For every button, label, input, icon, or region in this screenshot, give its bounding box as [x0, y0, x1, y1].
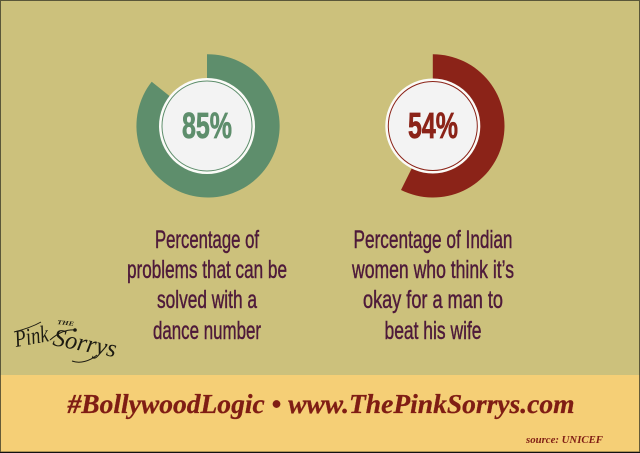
logo: The Pink Sorrys: Pink — [12, 321, 51, 353]
center badge: 85% — [159, 78, 255, 174]
logo: The Pink Sorrys: Sorrys — [51, 324, 119, 363]
center badge: 54%: 54% — [408, 105, 458, 146]
logo: The Pink Sorrys — [12, 320, 119, 363]
caption: dance number — [127, 226, 287, 345]
logo: The Pink Sorrys: THE — [57, 320, 74, 328]
source note: source: UNICEF — [525, 435, 603, 446]
donut chart: 85% — [136, 54, 280, 197]
panel: footer band — [0, 375, 640, 453]
footer headline: #BollywoodLogic • www.ThePinkSorrys.com — [66, 389, 575, 419]
center badge: 85%: 85% — [182, 105, 232, 146]
caption: dance number: problems that can be — [127, 256, 287, 284]
center badge: 54% — [385, 78, 480, 174]
caption: Indian women: beat his wife — [384, 317, 482, 345]
donut ring: green — [136, 54, 280, 197]
bottom edge line — [0, 452, 640, 453]
donut chart: 54% — [385, 54, 505, 197]
caption: dance number: Percentage of — [155, 226, 259, 254]
caption: Indian women: Percentage of Indian — [354, 226, 512, 254]
caption: dance number: dance number — [153, 317, 261, 345]
caption: Indian women: women who think it’s — [351, 256, 514, 284]
donut ring: red — [401, 54, 505, 197]
caption: Indian women: okay for a man to — [363, 286, 503, 314]
caption: dance number: solved with a — [157, 286, 257, 314]
caption: Indian women — [351, 226, 514, 345]
